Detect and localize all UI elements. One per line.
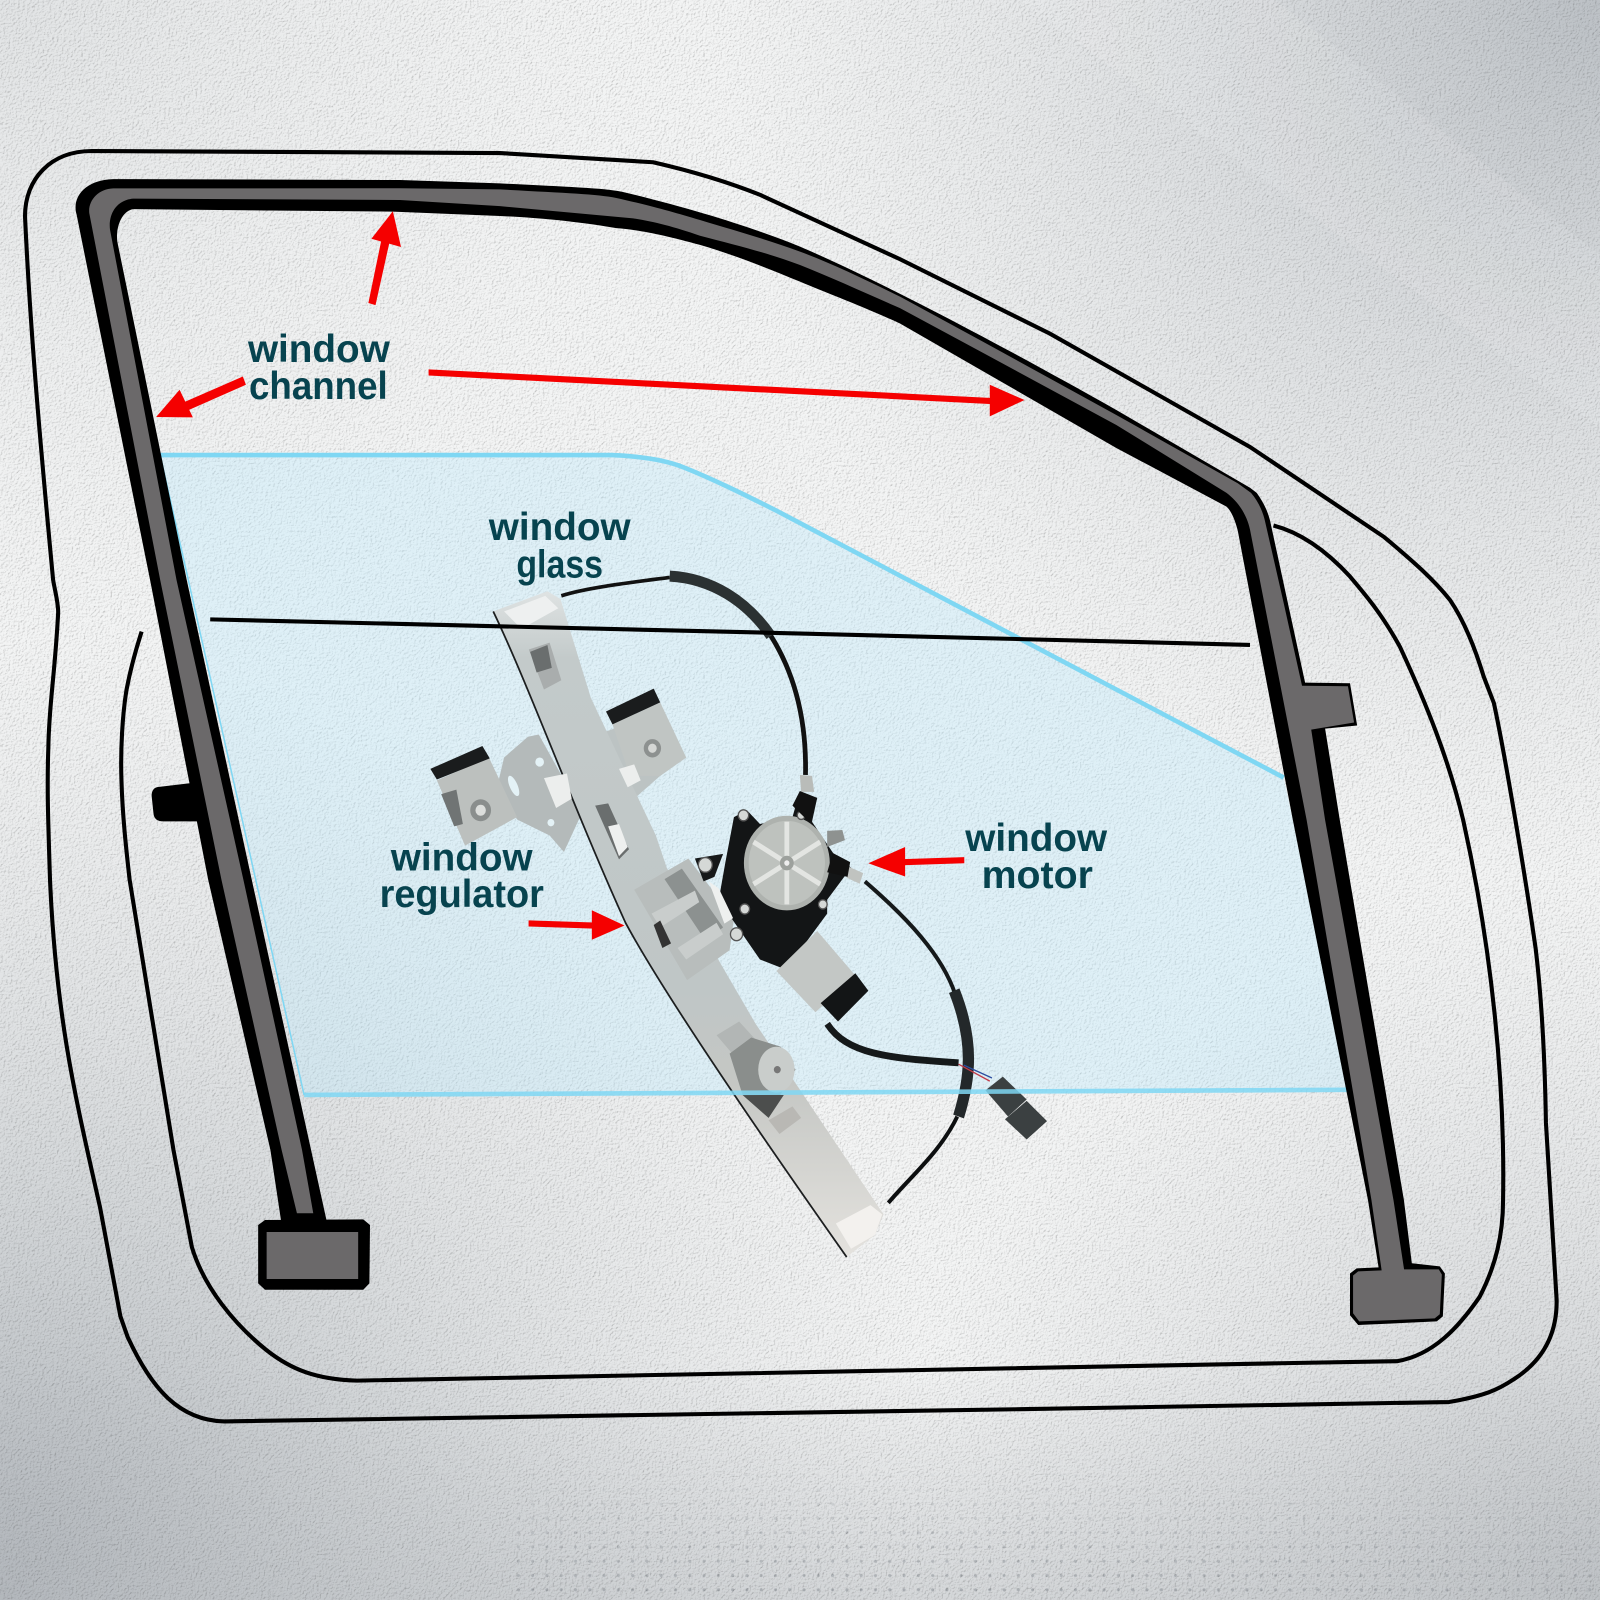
motor housing xyxy=(776,931,855,1012)
window channel frame xyxy=(76,179,1445,1325)
label: window regulator xyxy=(380,836,544,916)
right mount xyxy=(827,853,850,877)
label: window regulator: regulator xyxy=(380,873,544,916)
side tab xyxy=(827,830,845,847)
slide bump xyxy=(529,643,561,689)
label: window motor xyxy=(964,817,1108,897)
mid bracket xyxy=(634,858,734,980)
door inner outline xyxy=(121,526,1503,1381)
gear disc xyxy=(744,816,830,910)
door outer outline xyxy=(25,151,1557,1421)
arrow: channel top xyxy=(368,211,401,305)
channel grey strip xyxy=(89,188,1442,1321)
upper spring xyxy=(800,775,814,792)
arrow: channel left xyxy=(156,377,246,417)
wire: lower cable xyxy=(827,881,992,1203)
label: window motor: window xyxy=(964,817,1108,860)
label: window glass xyxy=(488,506,631,587)
label: window regulator: window xyxy=(390,836,533,879)
window glass pane xyxy=(160,455,1347,1095)
regulator rail plate xyxy=(493,591,884,1257)
screws xyxy=(698,810,827,941)
window motor xyxy=(695,775,868,1021)
regulator assembly xyxy=(430,576,1047,1257)
arrow: regulator xyxy=(529,910,624,940)
arrow: motor xyxy=(868,847,964,877)
bottom plate end xyxy=(836,1205,882,1249)
label: window channel: window xyxy=(247,328,391,371)
left mounting plate xyxy=(498,734,580,852)
label: window channel: channel xyxy=(249,365,388,408)
channel black xyxy=(76,179,1445,1325)
top plate end xyxy=(504,596,558,629)
plate slot xyxy=(595,803,629,859)
connector plug xyxy=(985,1077,1047,1139)
window glass edges xyxy=(160,455,1347,1095)
upper clamp xyxy=(606,689,686,776)
belt line xyxy=(210,619,1250,645)
right spring xyxy=(847,867,863,884)
left tab xyxy=(152,783,204,821)
rail edge xyxy=(493,611,847,1257)
left bottom block xyxy=(258,1219,370,1290)
bottom roller xyxy=(717,1021,801,1134)
left clamp xyxy=(430,746,517,846)
label: window glass: window xyxy=(488,506,631,549)
arrow: channel right xyxy=(429,369,1024,416)
motor end cap xyxy=(821,973,868,1021)
label: window motor: motor xyxy=(982,854,1093,897)
label: window channel xyxy=(247,328,391,408)
label: window glass: glass xyxy=(516,544,603,587)
wire: upper cable xyxy=(561,576,806,775)
cable mount xyxy=(792,791,817,823)
upper clamp bracket plate xyxy=(604,718,686,799)
white clips xyxy=(544,764,641,808)
